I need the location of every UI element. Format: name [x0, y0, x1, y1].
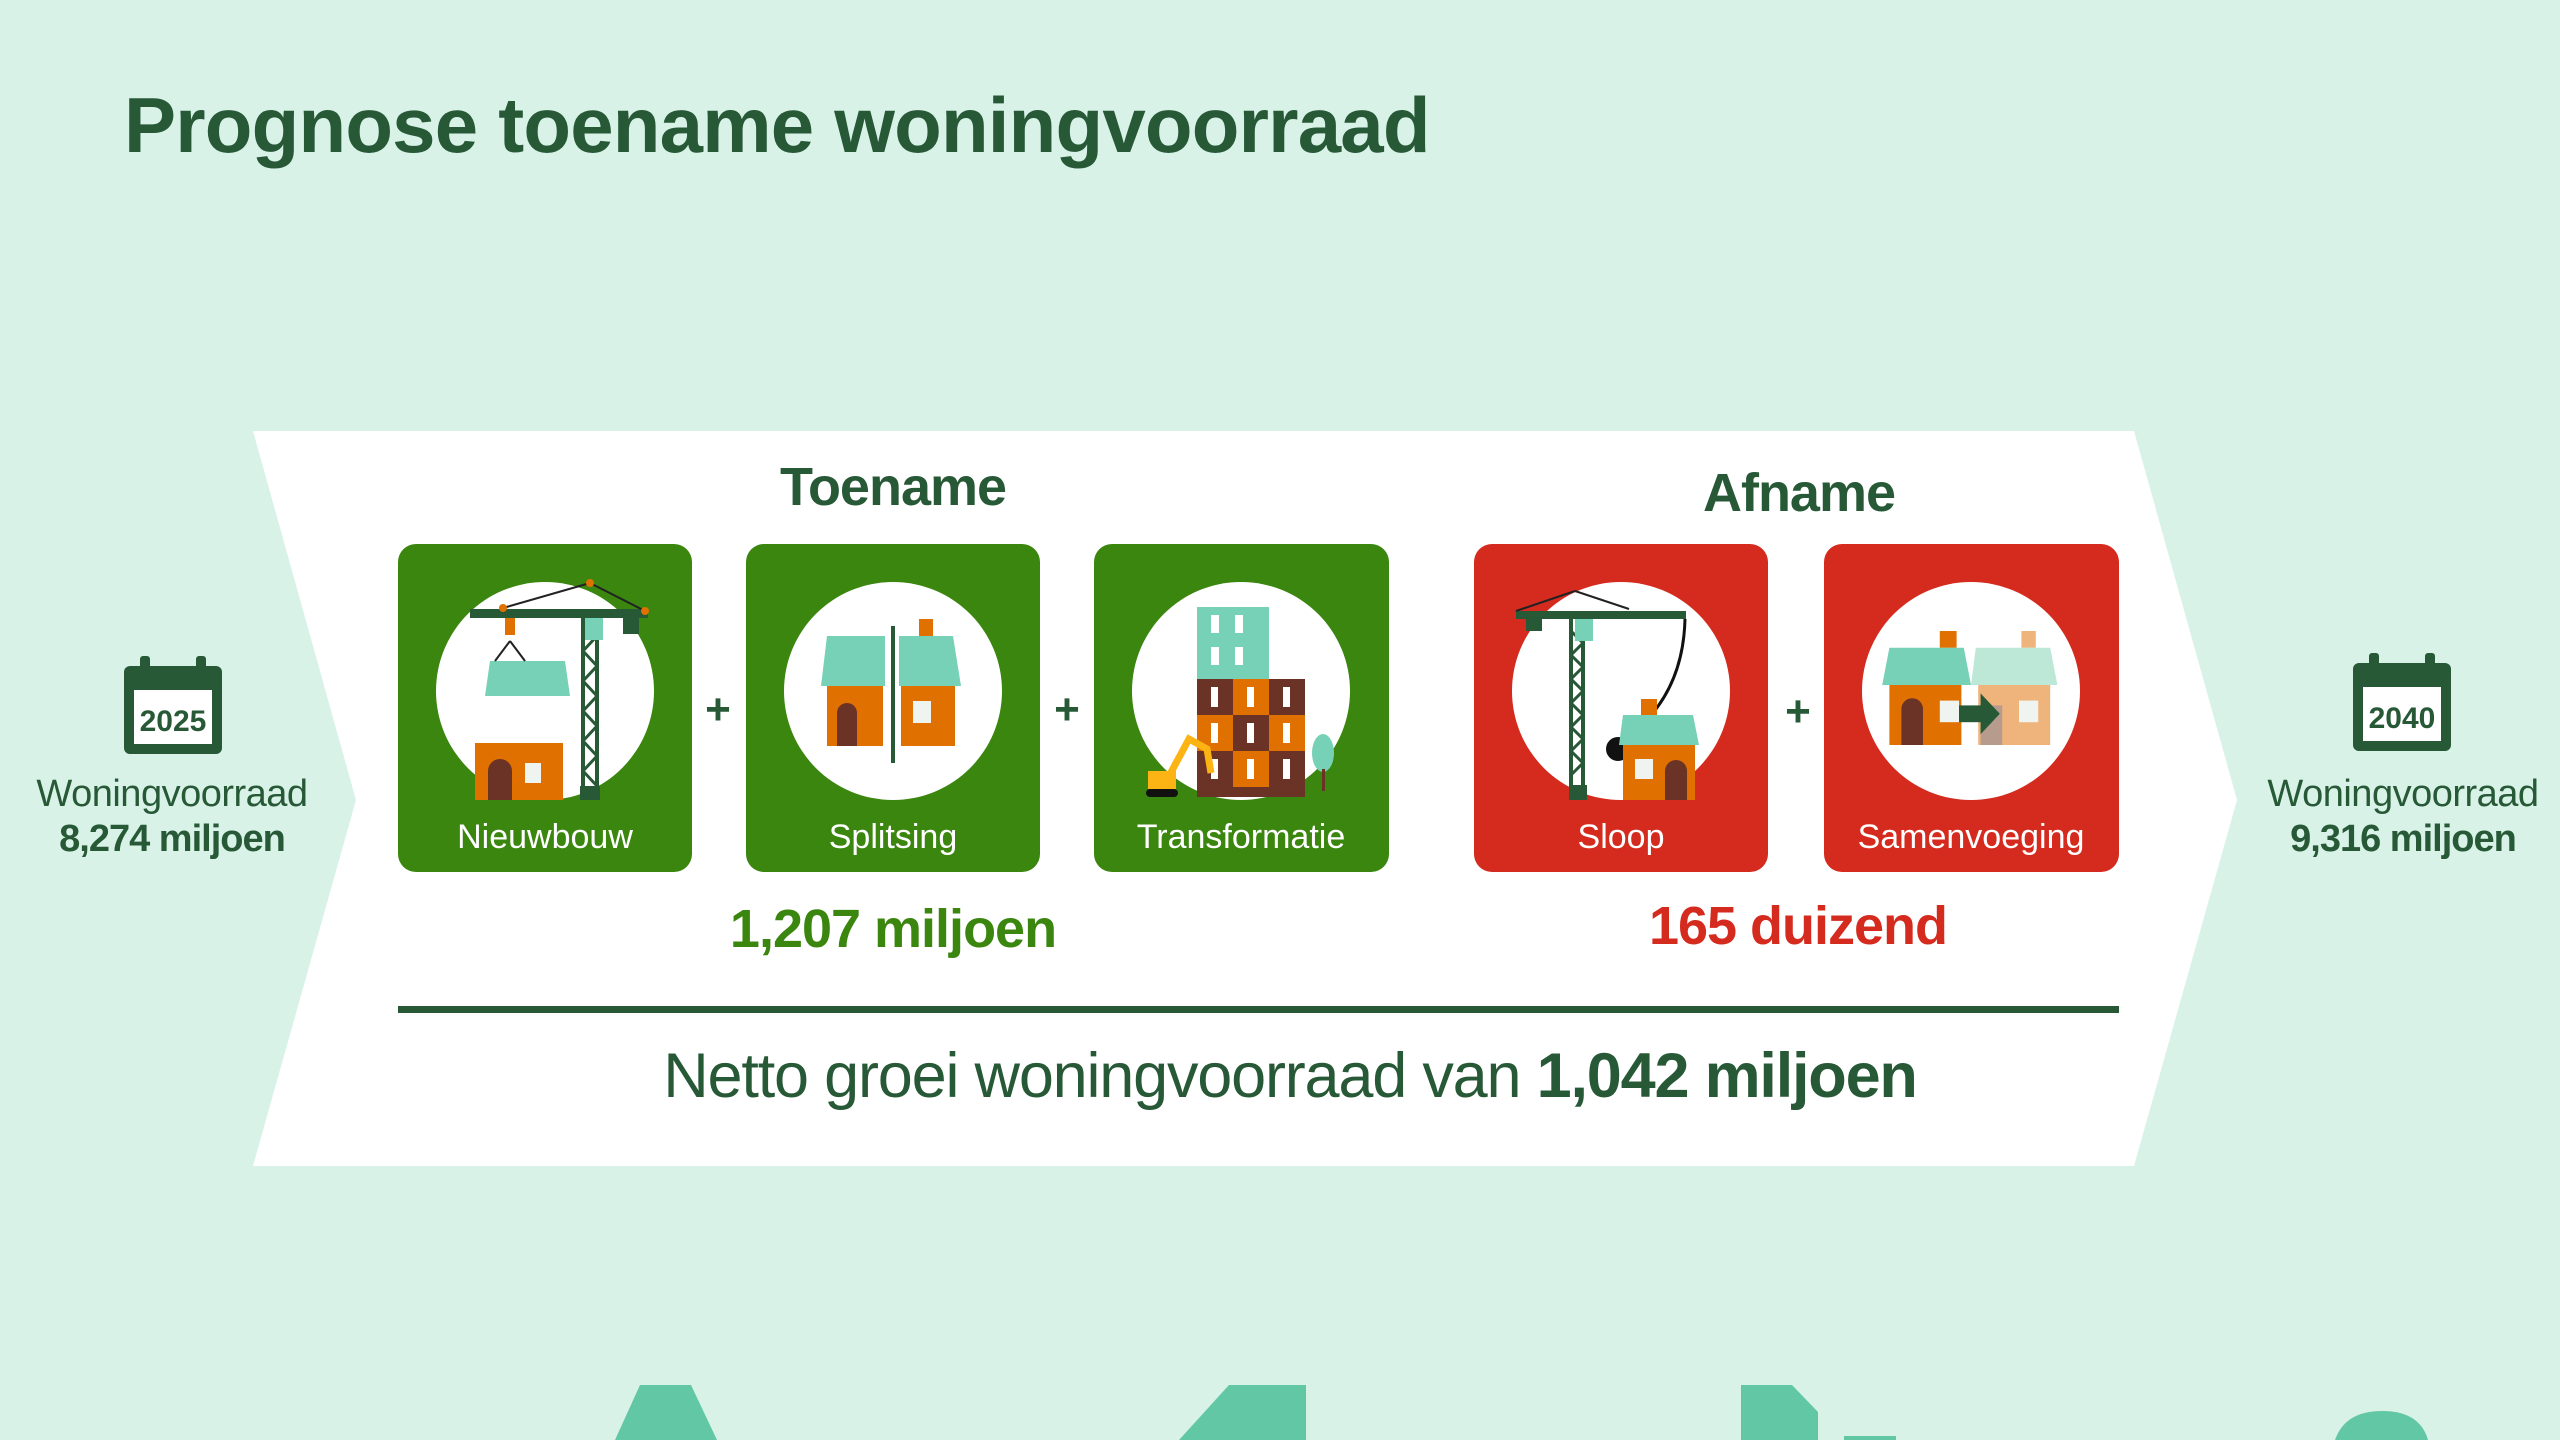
icon: crane with house [470, 579, 649, 800]
text: start stock: 8,274 miljoen [59, 818, 285, 860]
value: toename: 1,207 miljoen [730, 899, 1056, 959]
calendar: 2040: 2040 [2369, 702, 2435, 735]
text: start stock [36, 773, 308, 860]
calendar: 2025: 2025 [140, 705, 206, 738]
card: Transformatie [1094, 544, 1389, 872]
net growth text: Netto groei woningvoorraad van 1,042 miljoen [663, 1041, 1917, 1111]
card: Nieuwbouw [398, 544, 692, 872]
decorative skyline shapes [615, 1385, 2428, 1440]
icon: wrecking crane [1516, 591, 1699, 800]
text: end stock: Woningvoorraad [2267, 773, 2539, 815]
card: Sloop [1474, 544, 1768, 872]
panel: white arrow [253, 431, 2237, 1166]
calendar: 2040 [2353, 653, 2451, 751]
icon: split house [821, 619, 961, 763]
text: end stock [2267, 773, 2539, 860]
label: Samenvoeging: Samenvoeging [1858, 818, 2084, 856]
calendar: 2025 [124, 656, 222, 754]
label: Sloop: Sloop [1578, 818, 1664, 856]
icon: merging houses [1882, 631, 2057, 745]
title: Prognose toename woningvoorraad [124, 81, 1430, 169]
label: Splitsing: Splitsing [829, 818, 957, 856]
plus: + [705, 685, 731, 734]
card: Splitsing [746, 544, 1040, 872]
label: Nieuwbouw: Nieuwbouw [457, 818, 633, 856]
icon: building transformation [1146, 607, 1334, 797]
text: start stock: Woningvoorraad [36, 773, 308, 815]
heading: Toename: Toename [780, 457, 1006, 517]
card: Samenvoeging [1824, 544, 2119, 872]
value: afname: 165 duizend [1649, 896, 1947, 956]
label: Transformatie: Transformatie [1137, 818, 1345, 856]
heading: Afname: Afname [1703, 463, 1895, 523]
text: end stock: 9,316 miljoen [2290, 818, 2516, 860]
plus: + [1785, 687, 1811, 736]
plus: + [1054, 685, 1080, 734]
